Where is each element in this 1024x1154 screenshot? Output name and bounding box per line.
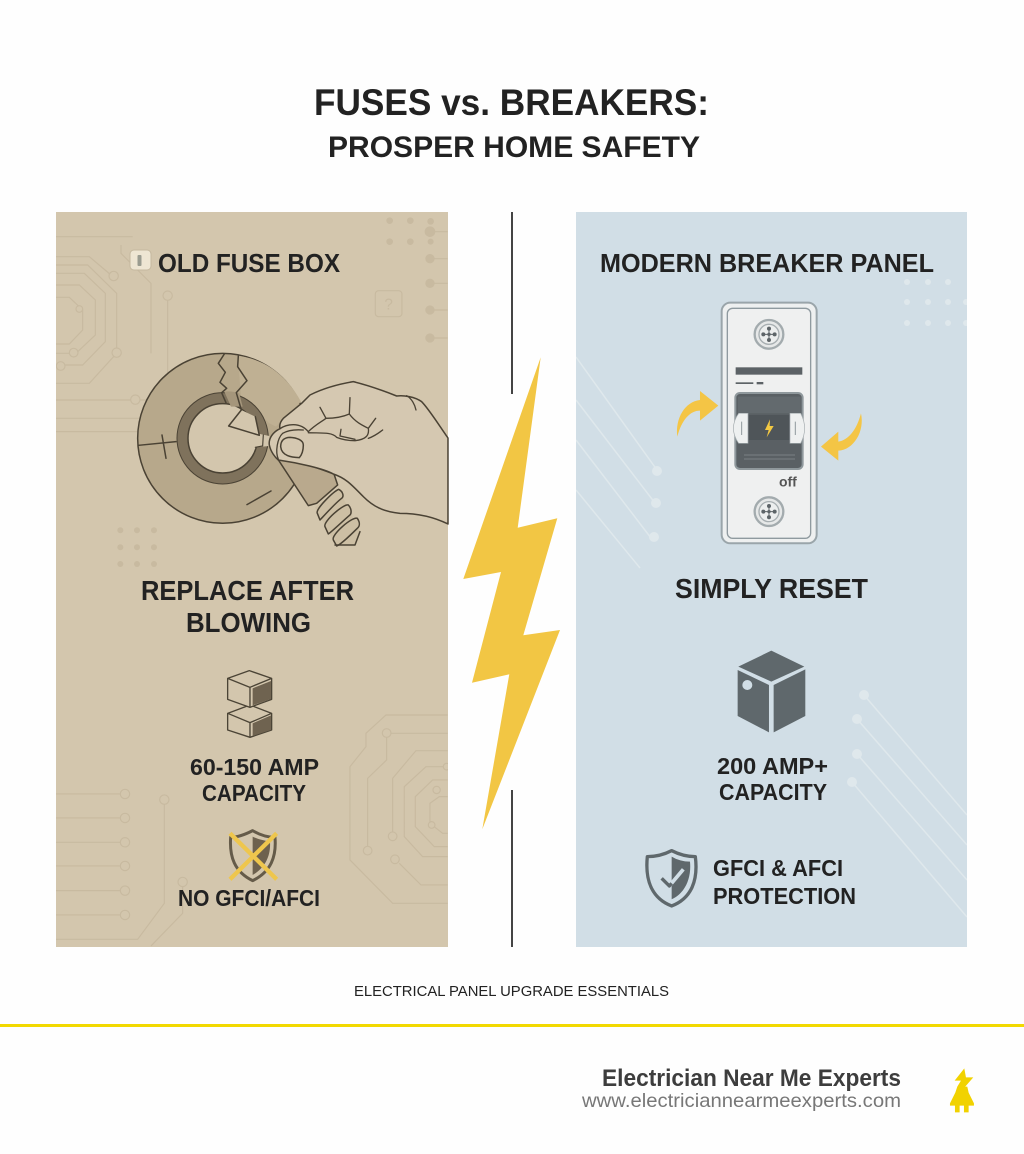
text: 60-150 amp capacity xyxy=(190,754,319,806)
footer brand: www.electriciannearmeexperts.com xyxy=(581,1090,901,1112)
illustration: hand pinching fuse xyxy=(269,382,448,546)
text: gfci and afci protection: GFCI & AFCI xyxy=(713,855,843,881)
title: FUSES vs. BREAKERS: xyxy=(314,82,709,123)
footer brand xyxy=(581,1065,901,1112)
text: replace after blowing: REPLACE AFTER xyxy=(141,575,354,606)
heading: old fuse box: OLD FUSE BOX xyxy=(158,248,341,278)
text: gfci and afci protection xyxy=(713,855,856,909)
icon: central lightning bolt xyxy=(463,357,560,829)
text: 200 amp+ capacity: CAPACITY xyxy=(719,779,827,805)
text: replace after blowing: BLOWING xyxy=(186,607,311,638)
icon: solid cube xyxy=(738,651,805,732)
title xyxy=(314,82,709,164)
text: replace after blowing xyxy=(141,575,354,638)
title: PROSPER HOME SAFETY xyxy=(328,131,700,164)
circuit background pattern, upper left xyxy=(56,217,448,567)
icon: yellow plug with bolt xyxy=(950,1068,974,1112)
illustration: broken fuse disc xyxy=(138,353,308,523)
text: gfci and afci protection: PROTECTION xyxy=(713,883,856,909)
icon: stacked boxes xyxy=(228,671,272,737)
caption: ELECTRICAL PANEL UPGRADE ESSENTIALS xyxy=(354,984,669,1000)
text: 200 amp+ capacity xyxy=(717,753,828,805)
arrows: reset direction xyxy=(677,391,862,461)
footer brand: Electrician Near Me Experts xyxy=(602,1065,901,1092)
text: no gfci/afci: NO GFCI/AFCI xyxy=(178,885,320,911)
illustration: circuit breaker switch: off xyxy=(779,474,797,490)
text: 60-150 amp capacity: 60-150 AMP xyxy=(190,754,319,780)
divider lines xyxy=(511,212,513,947)
circuit background pattern, lower xyxy=(56,715,450,946)
footer rule xyxy=(0,1024,1024,1027)
illustration: circuit breaker switch xyxy=(722,303,817,543)
icon: shield with check xyxy=(647,851,696,906)
circuit background pattern, upper left: ? xyxy=(384,296,393,313)
text: 200 amp+ capacity: 200 AMP+ xyxy=(717,753,828,779)
text: 60-150 amp capacity: CAPACITY xyxy=(202,780,306,806)
panel: modern breaker panel xyxy=(576,212,969,947)
heading: modern breaker panel: MODERN BREAKER PANEL xyxy=(600,248,934,278)
decorative wires and dots xyxy=(576,279,969,917)
icon: crossed out shield xyxy=(230,831,277,881)
text: simply reset: SIMPLY RESET xyxy=(675,573,868,604)
panel: old fuse box xyxy=(56,212,450,947)
icon: small fuse badge xyxy=(130,250,151,270)
